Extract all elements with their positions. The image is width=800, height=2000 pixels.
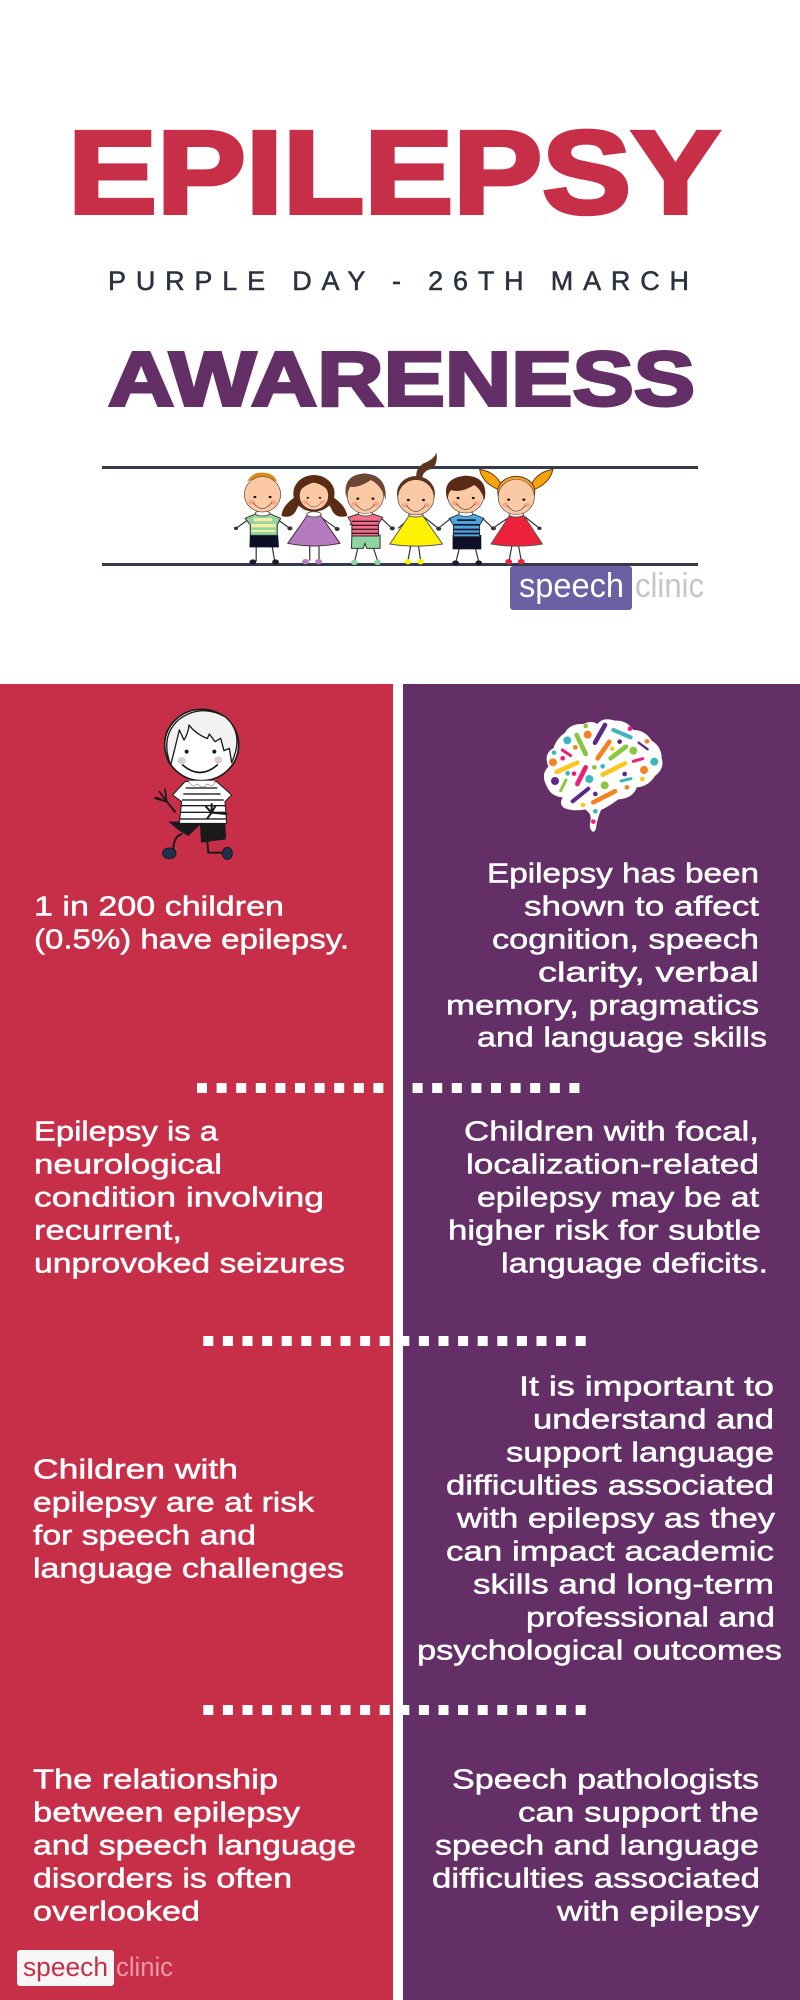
text: what epilepsy is [34, 1116, 345, 1278]
text: 1 in 200 children [34, 890, 349, 954]
text: effects of epilepsy on cognition: memory, pragmatics [446, 990, 759, 1020]
text: speech pathologists: speech and language [435, 1830, 759, 1860]
kid 3 [351, 535, 380, 548]
text: effects of epilepsy on cognition: shown to affect [524, 890, 759, 922]
text: importance of support: support language [506, 1436, 774, 1468]
text: overlooked relationship [33, 1764, 356, 1926]
text: speech pathologists: Speech pathologists [452, 1764, 759, 1794]
text: effects of epilepsy on cognition: clarity, verbal [538, 956, 759, 988]
text: effects of epilepsy on cognition: Epilepsy has been [487, 858, 759, 888]
text: what epilepsy is: recurrent, [34, 1214, 182, 1246]
text: focal epilepsy risk: language deficits. [501, 1248, 768, 1278]
hands [234, 526, 542, 531]
text: focal epilepsy risk: localization-related [466, 1148, 759, 1180]
text: focal epilepsy risk [448, 1116, 768, 1278]
text: importance of support: It is important to [519, 1370, 774, 1402]
text: effects of epilepsy on cognition [446, 858, 767, 1052]
text: 1 in 200 children: 1 in 200 children [34, 890, 284, 922]
kid 4 [390, 515, 442, 546]
text: importance of support: understand and [533, 1404, 774, 1434]
logo: speech clinic (footer): speech [23, 1952, 108, 1982]
title: EPILEPSY: EPILEPSY [68, 107, 720, 239]
panel: purple column [403, 684, 800, 2000]
text: what epilepsy is: unprovoked seizures [34, 1248, 345, 1278]
text: overlooked relationship: The relationship [33, 1764, 278, 1794]
text: children at risk [33, 1454, 344, 1584]
text: what epilepsy is: condition involving [34, 1182, 324, 1212]
text: effects of epilepsy on cognition: cognition, speech [492, 924, 759, 954]
heading: AWARENESS: AWARENESS [108, 336, 695, 422]
kid 1 [249, 535, 279, 547]
text: children at risk: epilepsy are at risk [33, 1486, 314, 1518]
kid 2 [281, 490, 308, 517]
text: importance of support: can impact academic [446, 1536, 774, 1566]
text: speech pathologists: can support the [518, 1796, 759, 1828]
shoes [249, 559, 482, 566]
text: effects of epilepsy on cognition: and language skills [477, 1022, 767, 1052]
text: what epilepsy is: Epilepsy is a [34, 1116, 219, 1146]
text: speech pathologists [432, 1764, 760, 1926]
text: speech pathologists: with epilepsy [556, 1896, 759, 1926]
text: overlooked relationship: between epilepsy [33, 1796, 300, 1828]
panel: red column [0, 684, 393, 2000]
text: importance of support: psychological outcomes [417, 1634, 782, 1666]
illustration: children holding hands between two rules [102, 453, 698, 566]
logo: speech clinic (purple) [510, 566, 704, 610]
text: overlooked relationship: and speech language [33, 1830, 356, 1860]
divider: dotted row 2 [203, 1336, 586, 1346]
text: children at risk: Children with [33, 1454, 238, 1484]
kid 5 [453, 535, 481, 549]
text: importance of support: skills and long-term [473, 1568, 774, 1600]
legs [256, 545, 521, 562]
divider: dotted row 1 [197, 1083, 579, 1093]
logo: speech clinic (footer) [17, 1950, 173, 1986]
text: 1 in 200 children: (0.5%) have epilepsy. [34, 924, 349, 954]
kid 6 [491, 515, 542, 546]
text: importance of support: professional and [526, 1602, 775, 1632]
logo: speech clinic (footer): clinic [116, 1952, 173, 1982]
icon: cartoon boy [155, 709, 239, 859]
text: importance of support: with epilepsy as they [456, 1502, 775, 1534]
logo: speech clinic (purple): speech [519, 567, 624, 605]
text: overlooked relationship: overlooked [33, 1896, 200, 1926]
text: children at risk: for speech and [33, 1520, 256, 1550]
subtitle: Purple Day: PURPLE DAY - 26TH MARCH [108, 266, 689, 296]
text: importance of support [417, 1370, 782, 1666]
text: speech pathologists: difficulties associated [432, 1862, 760, 1894]
text: focal epilepsy risk: higher risk for subtle [448, 1214, 761, 1246]
text: children at risk: language challenges [33, 1552, 344, 1584]
icon: colourful brain [544, 719, 662, 832]
divider: dotted row 3 [203, 1705, 586, 1715]
text: importance of support: difficulties associated [446, 1470, 774, 1500]
text: focal epilepsy risk: epilepsy may be at [477, 1182, 759, 1212]
text: overlooked relationship: disorders is often [33, 1862, 292, 1894]
text: focal epilepsy risk: Children with focal, [464, 1116, 759, 1146]
text: what epilepsy is: neurological [34, 1148, 222, 1180]
logo: speech clinic (purple): clinic [635, 567, 704, 605]
arms [236, 517, 539, 528]
